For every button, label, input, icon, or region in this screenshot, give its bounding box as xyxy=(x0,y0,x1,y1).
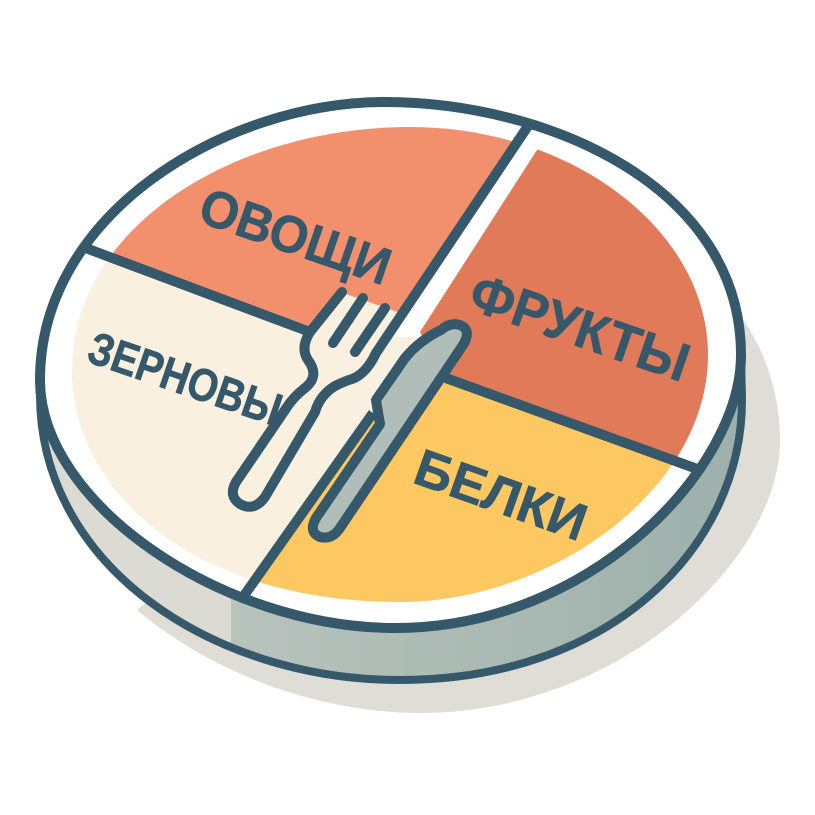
plate infographic xyxy=(35,97,780,713)
icon: fork xyxy=(233,292,385,507)
plate outline xyxy=(40,102,741,628)
divider lines xyxy=(83,123,700,597)
section: proteins xyxy=(260,382,672,602)
icon: knife xyxy=(313,324,467,538)
food sections xyxy=(72,127,708,602)
label: fruits: ФРУКТЫ xyxy=(462,263,697,394)
label: vegetables: ОВОЩИ xyxy=(192,178,398,297)
section: grains xyxy=(72,262,418,579)
plate top face xyxy=(40,102,741,628)
plate side rim xyxy=(36,367,746,684)
drop shadow xyxy=(137,318,780,713)
label: proteins: БЕЛКИ xyxy=(407,439,594,553)
label: grains: ЗЕРНОВЫ xyxy=(82,321,289,436)
section: vegetables xyxy=(113,127,512,326)
section: fruits xyxy=(420,150,708,456)
